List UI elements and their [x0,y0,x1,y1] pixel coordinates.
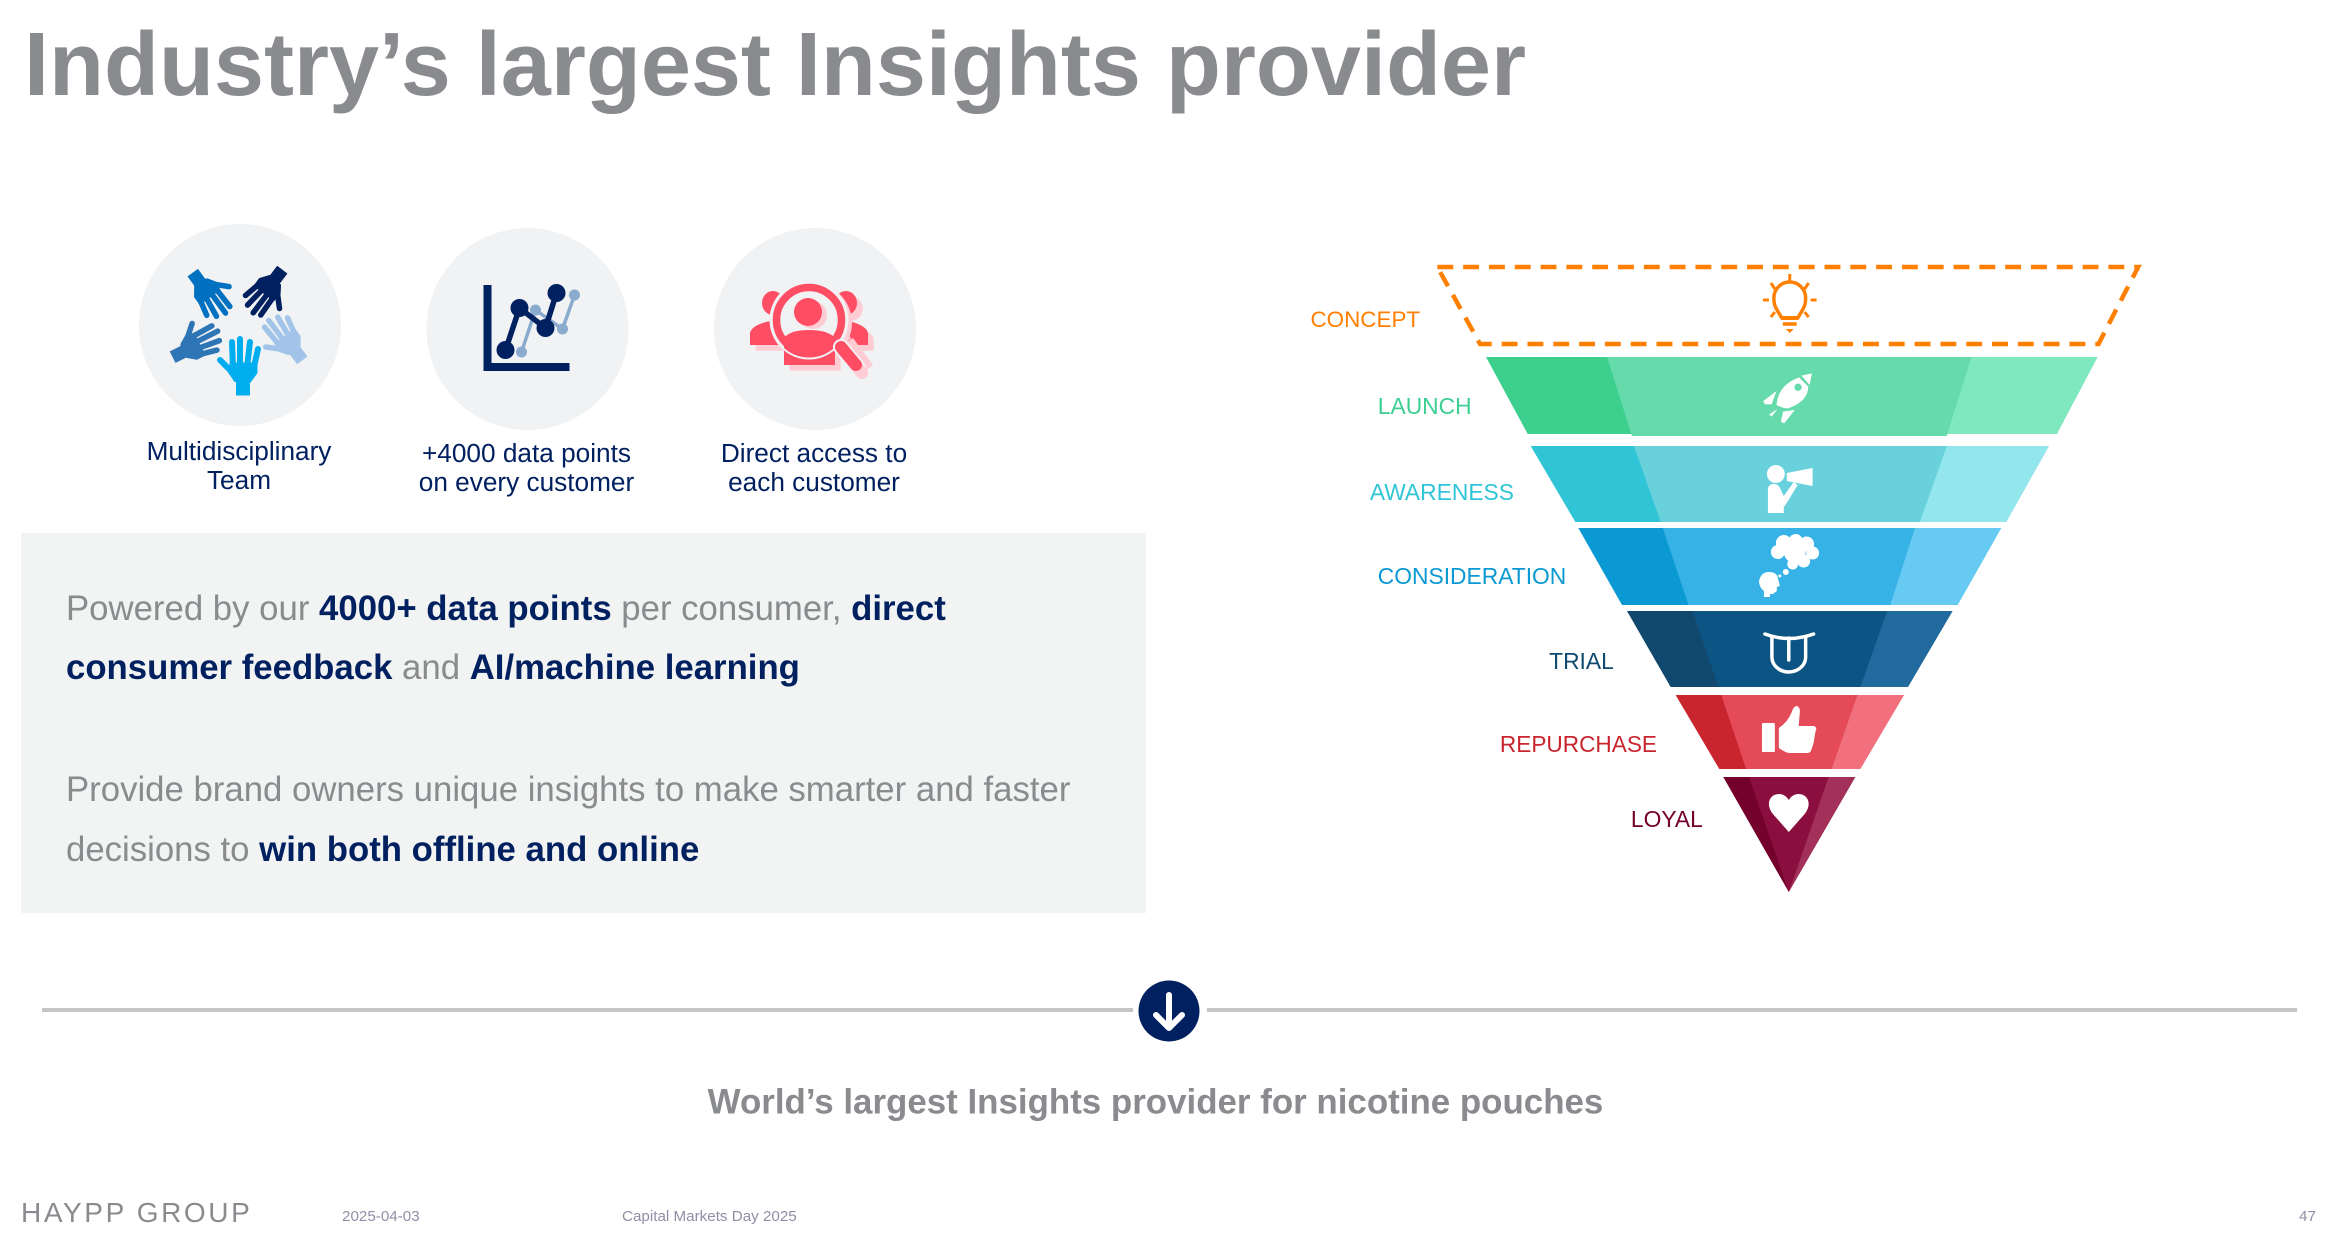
stage: loyal: LOYAL [1631,806,1703,832]
event: Capital Markets Day 2025 [622,1208,797,1225]
stage: consideration: CONSIDERATION [1378,563,1566,589]
label: data points: +4000 data points [422,438,631,468]
stage: loyal [1631,777,1855,892]
icon: heart [1769,794,1809,832]
stage: repurchase: REPURCHASE [1500,731,1657,757]
page number: 47 [2299,1208,2316,1225]
text: data points: and AI/machine learning [402,649,800,687]
icon: team hands [139,224,341,426]
stage: consideration [1378,528,2001,605]
stage: concept: CONCEPT [1310,307,1420,332]
text: data points: Powered by our 4000+ data points per consumer, direct [66,590,946,628]
text: brand owners: decisions to [66,831,259,869]
icon: thought cloud [1759,534,1819,597]
icon: thumbs up [1762,706,1816,753]
icon: customer search [714,228,916,430]
panel: text callout [21,533,1146,913]
stage: launch [1378,357,2098,436]
stage: awareness [1370,446,2049,522]
stage: trial [1549,611,1953,687]
stage: launch: LAUNCH [1378,393,1472,419]
icon: megaphone person [1767,465,1813,513]
stage: awareness: AWARENESS [1370,479,1514,505]
stage: trial: TRIAL [1549,648,1614,674]
logo: HAYPP GROUP [21,1197,252,1228]
icon: data chart [426,228,628,430]
conclusion text: World’s largest Insights provider for nicotine pouches [708,1082,1603,1122]
text: data points: consumer feedback [66,649,393,687]
stage: concept [1310,267,2138,344]
label: data points: on every customer [419,467,634,497]
label: multidisciplinary team: Team [207,465,271,495]
text: brand owners: win both offline and online [258,831,699,869]
icon: tongue [1765,634,1814,672]
title: Industry’s largest Insights provider [24,15,1526,115]
funnel chart [1310,267,2138,892]
icon: light bulb [1763,274,1817,333]
label: multidisciplinary team: Multidisciplinary [147,436,332,466]
icon: rocket [1763,373,1812,423]
icon: down arrow [1138,980,1200,1042]
footer [21,1197,2316,1228]
label: direct access: each customer [728,467,900,497]
text: brand owners: Provide brand owners unique insights to make smarter and faster [66,771,1070,809]
panel: team icons [139,224,916,497]
date: 2025-04-03 [342,1208,420,1225]
stage: repurchase [1500,695,1904,769]
divider with arrow [42,980,2297,1042]
label: direct access: Direct access to [721,438,907,468]
